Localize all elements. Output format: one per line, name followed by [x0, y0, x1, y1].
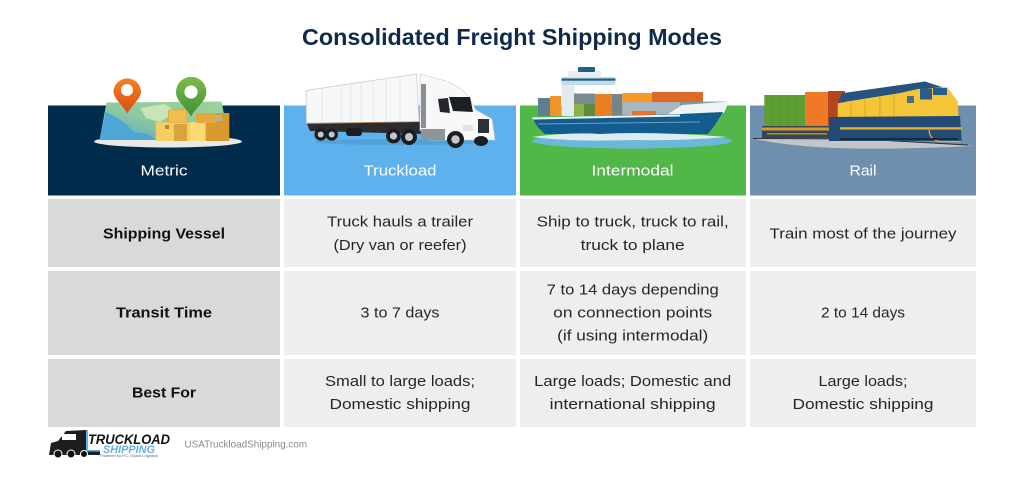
row: shipping vessel: Train most of the journey	[770, 225, 957, 242]
row: transit time: 3 to 7 days	[360, 305, 440, 322]
header: truckload: Truckload	[364, 162, 436, 180]
icon: orange pin	[114, 78, 141, 114]
row: best for: Large loads; Domestic and	[534, 373, 731, 390]
header: rail: Rail	[850, 162, 876, 180]
header: metric: Metric	[140, 162, 188, 180]
row: transit time: 2 to 14 days	[821, 305, 905, 322]
header: truckload	[284, 106, 516, 196]
icon: locomotive with containers	[753, 82, 973, 149]
row: best for: Large loads;	[818, 373, 908, 390]
row: shipping vessel: truck to plane	[581, 237, 685, 254]
header: intermodal: Intermodal	[592, 162, 674, 180]
icon: green pin	[176, 77, 206, 116]
footer logo: Powered by IFC Global Logistics	[100, 454, 158, 458]
header: metric	[48, 106, 280, 196]
header: rail	[750, 106, 976, 196]
title: Consolidated Freight Shipping Modes	[302, 24, 722, 50]
row: transit time: Transit Time	[116, 305, 212, 322]
row: best for: international shipping	[550, 396, 716, 413]
row: shipping vessel: Ship to truck, truck to rail,	[537, 214, 729, 231]
icon: map with pins and boxes	[94, 77, 242, 148]
row: shipping vessel: Truck hauls a trailer	[327, 214, 473, 231]
row: transit time	[48, 271, 976, 355]
row: best for: Domestic shipping	[330, 396, 470, 413]
comparison table	[48, 106, 976, 427]
row: shipping vessel	[48, 199, 976, 267]
footer logo	[49, 430, 170, 458]
icon: semi truck	[306, 74, 495, 148]
row: best for	[48, 359, 976, 427]
row: transit time: 7 to 14 days depending	[547, 281, 719, 298]
row: transit time: on connection points	[553, 305, 712, 322]
footer logo: TRUCKLOAD	[88, 432, 170, 447]
row: best for: Best For	[132, 384, 196, 401]
row: shipping vessel: Shipping Vessel	[103, 225, 225, 242]
icon: container ship	[532, 67, 732, 148]
row: best for: Small to large loads;	[325, 373, 475, 390]
row: transit time: (if using intermodal)	[557, 328, 708, 345]
icon: logo truck	[49, 430, 100, 458]
footer logo: SHIPPING	[103, 444, 155, 456]
row: shipping vessel: (Dry van or reefer)	[334, 237, 467, 254]
row: best for: Domestic shipping	[792, 396, 934, 413]
website url: USATruckloadShipping.com	[184, 438, 307, 450]
header: intermodal	[520, 106, 746, 196]
